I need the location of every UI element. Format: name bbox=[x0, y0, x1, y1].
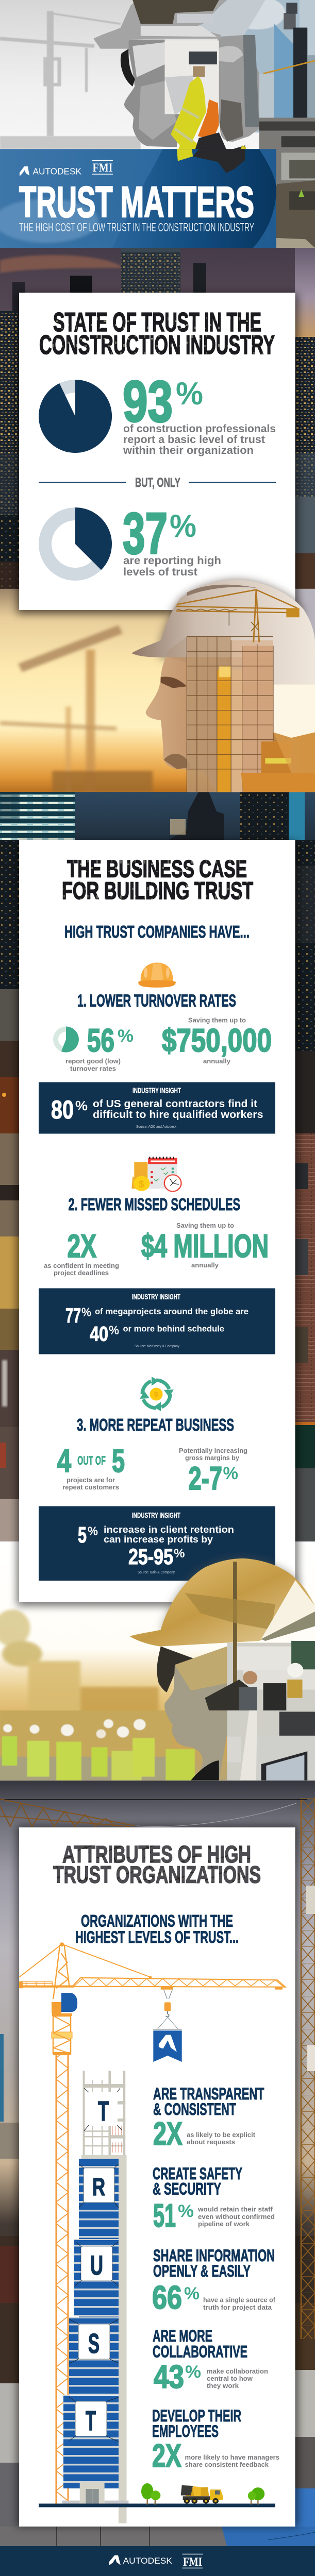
illustration: TRUST building tower bbox=[81, 2071, 127, 2523]
text: basic level of trust: within their organization bbox=[123, 445, 254, 456]
stat: 2-7 percent margins: % bbox=[223, 1464, 238, 1483]
attribute: collaborative: COLLABORATIVE bbox=[153, 2342, 247, 2361]
footer with logos: AUTODESK bbox=[123, 2556, 172, 2566]
attribute: collaborative: they work bbox=[207, 2382, 239, 2389]
callout: industry insight 3: Source: Bain & Company bbox=[138, 1571, 175, 1574]
attribute: develop employees: more likely to have managers bbox=[185, 2453, 279, 2461]
stat: 2-7 percent margins: Potentially increasing bbox=[179, 1447, 247, 1454]
attribute: share information: OPENLY & EASILY bbox=[153, 2262, 251, 2280]
card shadows bbox=[17, 294, 298, 2527]
attribute: transparent and consistent: as likely to be explicit bbox=[187, 2131, 256, 2139]
attribute: collaborative bbox=[153, 2327, 268, 2395]
callout: industry insight 1: difficult to hire qualified workers bbox=[93, 1109, 263, 1121]
pie chart: 56 percent bbox=[53, 1026, 79, 1052]
heading: state of trust bbox=[39, 308, 275, 360]
photo: man in hard hat with building inside bbox=[131, 580, 315, 792]
attribute: collaborative: ARE MORE bbox=[153, 2327, 212, 2345]
callout: industry insight 3: % bbox=[88, 1524, 98, 1538]
subheading: highest levels of trust: HIGHEST LEVELS OF TRUST... bbox=[75, 1928, 239, 1946]
text: basic level of trust bbox=[123, 423, 276, 456]
attribute: develop employees: share consistent feedback bbox=[185, 2461, 269, 2468]
attribute: collaborative: 43 bbox=[154, 2359, 184, 2395]
attribute: safety and security: would retain their staff bbox=[197, 2205, 273, 2213]
stat: 37 percent: % bbox=[170, 509, 196, 544]
icon: calendar, coins and clock bbox=[131, 1157, 181, 1191]
callout: industry insight 3: 5 bbox=[78, 1522, 87, 1548]
ground line bbox=[39, 2504, 275, 2507]
subheading: highest levels of trust bbox=[75, 1911, 239, 1946]
attribute: develop employees: 2X bbox=[152, 2438, 181, 2474]
stat: 4 out of 5: OUT OF bbox=[77, 1454, 106, 1468]
callout: industry insight 2: 77 bbox=[65, 1304, 81, 1327]
logos: Autodesk and FMI bbox=[20, 161, 113, 176]
stat: 2X confidence: 2X bbox=[67, 1228, 96, 1264]
callout: industry insight 1: INDUSTRY INSIGHT bbox=[132, 1086, 181, 1095]
stat: 2X confidence bbox=[44, 1228, 119, 1277]
logos: Autodesk and FMI: FMI bbox=[93, 161, 113, 174]
callout: industry insight 1 bbox=[39, 1082, 275, 1133]
callout: industry insight 3: can increase profits by bbox=[104, 1534, 213, 1545]
stat: 4 million savings: Saving them up to bbox=[176, 1222, 234, 1229]
callout: industry insight 2: or more behind schedule bbox=[123, 1324, 224, 1333]
header photo: two workers double exposure bbox=[0, 0, 315, 248]
stat: 2X confidence: project deadlines bbox=[54, 1269, 109, 1277]
stat: 2-7 percent margins: 2-7 bbox=[189, 1461, 222, 1497]
attribute: develop employees: EMPLOYEES bbox=[152, 2422, 219, 2441]
heading: lower turnover rates: 1. LOWER TURNOVER RATES bbox=[77, 991, 236, 1010]
attribute: share information: truth for project data bbox=[203, 2303, 272, 2311]
banner letters T R U S T: T bbox=[86, 2405, 96, 2436]
stat: 4 million savings: annually bbox=[191, 1261, 219, 1269]
logos: Autodesk and FMI: AUTODESK bbox=[33, 166, 81, 176]
night buildings background bbox=[0, 792, 315, 1541]
stat: 93 percent: 93 bbox=[123, 369, 173, 434]
panel: state of trust bbox=[19, 293, 295, 610]
text: high levels of trust: are reporting high bbox=[123, 555, 221, 567]
banner letters T R U S T: S bbox=[88, 2328, 100, 2359]
footer with logos: FMI bbox=[183, 2555, 202, 2568]
stat: 2-7 percent margins: gross margins by bbox=[185, 1454, 240, 1462]
pie chart: 37 percent bbox=[39, 507, 112, 581]
illustration: tower crane bbox=[19, 1942, 285, 2505]
banner letters T R U S T: U bbox=[90, 2250, 103, 2281]
icon: repeat cycle with coin bbox=[140, 1377, 174, 1411]
callout: industry insight 2: 40 bbox=[90, 1323, 108, 1346]
heading: business case bbox=[62, 855, 253, 905]
photo: woman in hard hat with office inside bbox=[129, 1558, 315, 1781]
callout: industry insight 3 bbox=[39, 1506, 275, 1581]
attribute: safety and security: % bbox=[178, 2201, 194, 2221]
attribute: transparent and consistent bbox=[153, 2084, 264, 2152]
attribute: safety and security bbox=[153, 2164, 275, 2234]
callout: industry insight 2 bbox=[39, 1288, 275, 1354]
text: basic level of trust: of construction professionals bbox=[123, 423, 276, 435]
attribute: collaborative: % bbox=[185, 2362, 201, 2382]
stat: 37 percent: 37 bbox=[123, 501, 168, 566]
callout: industry insight 2: Source: McKinsey & Company bbox=[135, 1345, 179, 1348]
callout: industry insight 2: % bbox=[81, 1306, 91, 1319]
banner letters T R U S T: T bbox=[98, 2096, 109, 2127]
heading: attributes bbox=[53, 1841, 261, 1888]
illustration: hook with Autodesk banner bbox=[153, 2002, 182, 2062]
crane jib and tower in the gray sky bbox=[0, 1798, 315, 2339]
text: basic level of trust: report a basic level of trust bbox=[123, 434, 265, 446]
stat: 56 percent: % bbox=[118, 1026, 134, 1046]
stat: 4 out of 5 bbox=[57, 1443, 125, 1491]
heading: more repeat business: 3. MORE REPEAT BUSINESS bbox=[77, 1415, 234, 1434]
illustration: cement truck bbox=[181, 2485, 223, 2504]
callout: industry insight 3: increase in client retention bbox=[104, 1524, 234, 1535]
subheading: highest levels of trust: ORGANIZATIONS WITH THE bbox=[81, 1911, 233, 1930]
attribute: safety and security: even without confirmed bbox=[198, 2213, 275, 2221]
callout: industry insight 3: INDUSTRY INSIGHT bbox=[132, 1511, 180, 1520]
attribute: safety and security: & SECURITY bbox=[153, 2179, 221, 2198]
yellow photo: blurred workers and office background bbox=[0, 1541, 315, 1781]
callout: industry insight 3: 25-95 bbox=[128, 1545, 173, 1569]
attribute: share information bbox=[152, 2246, 276, 2316]
callout: industry insight 2: % bbox=[109, 1324, 119, 1337]
attribute: safety and security: 51 bbox=[153, 2198, 176, 2234]
attribute: safety and security: CREATE SAFETY bbox=[153, 2164, 242, 2183]
stat: 4 million savings bbox=[141, 1222, 269, 1269]
stat: 4 out of 5: repeat customers bbox=[62, 1483, 119, 1491]
text: low turnover: report good (low) bbox=[65, 1057, 121, 1065]
stat: 750,000 savings bbox=[162, 1016, 272, 1065]
icon: repeat cycle with coin: $ bbox=[154, 1390, 158, 1398]
attribute: share information: % bbox=[184, 2284, 200, 2303]
attribute: collaborative: make collaboration bbox=[207, 2367, 268, 2375]
stat: 750,000 savings: $750,000 bbox=[162, 1023, 272, 1059]
banner letters T R U S T: R bbox=[92, 2174, 105, 2201]
text: high levels of trust bbox=[123, 555, 221, 578]
illustration: trees bbox=[141, 2483, 264, 2504]
stat: 93 percent: % bbox=[176, 376, 203, 412]
panel: attributes of high trust organizations bbox=[19, 1827, 295, 2527]
stat: 56 percent: 56 bbox=[87, 1023, 114, 1059]
callout: industry insight 3: % bbox=[174, 1547, 185, 1561]
attribute: transparent and consistent: about requests bbox=[187, 2138, 235, 2146]
text: low turnover bbox=[65, 1057, 121, 1073]
heading: attributes: ATTRIBUTES OF HIGH bbox=[62, 1841, 251, 1868]
stat: 4 million savings: $4 MILLION bbox=[141, 1228, 269, 1264]
panel: business case bbox=[19, 840, 295, 1602]
text: low turnover: turnover rates bbox=[70, 1064, 116, 1073]
stat: 4 out of 5: projects are for bbox=[67, 1476, 115, 1484]
attribute: transparent and consistent: ARE TRANSPARENT bbox=[153, 2084, 264, 2103]
orange photo: crane and man in hard hat background bbox=[0, 589, 315, 792]
building entrance bbox=[62, 2483, 128, 2504]
stat: 2X confidence: as confident in meeting bbox=[44, 1262, 119, 1269]
callout: industry insight 1: % bbox=[75, 1098, 88, 1113]
stat: 750,000 savings: annually bbox=[203, 1057, 231, 1065]
attribute: collaborative: central to how bbox=[207, 2375, 253, 2382]
footer with logos bbox=[0, 2546, 315, 2576]
callout: industry insight 1: of US general contractors find it bbox=[93, 1098, 257, 1110]
icon: calendar, coins and clock: $ bbox=[139, 1179, 144, 1190]
attribute: develop employees: DEVELOP THEIR bbox=[152, 2406, 241, 2425]
stat: 4 out of 5: 5 bbox=[112, 1443, 125, 1479]
city skyline background bbox=[0, 248, 315, 589]
attribute: safety and security: pipeline of work bbox=[198, 2220, 250, 2228]
stat: 2-7 percent margins bbox=[179, 1447, 247, 1497]
attribute: transparent and consistent: & CONSISTENT bbox=[153, 2100, 236, 2119]
attribute: develop employees bbox=[152, 2406, 279, 2474]
pie chart: 93 percent bbox=[39, 380, 112, 453]
gray sky and crane background bbox=[0, 1781, 315, 2546]
callout: industry insight 1: Source: AGC and Autodesk bbox=[136, 1125, 176, 1129]
callout: industry insight 1: 80 bbox=[51, 1095, 74, 1124]
stat: 750,000 savings: Saving them up to bbox=[188, 1016, 246, 1024]
attribute: transparent and consistent: 2X bbox=[153, 2116, 183, 2152]
callout: industry insight 2: INDUSTRY INSIGHT bbox=[132, 1293, 180, 1301]
attribute: share information: 66 bbox=[152, 2280, 182, 2316]
stat: 4 out of 5: 4 bbox=[57, 1443, 71, 1479]
callout: industry insight 2: of megaprojects around the globe are bbox=[95, 1307, 248, 1316]
text: high levels of trust: levels of trust bbox=[123, 566, 197, 578]
icon: hard hat bbox=[138, 963, 176, 988]
banner letters T R U S T bbox=[69, 2088, 122, 2442]
divider: but, only: BUT, ONLY bbox=[135, 476, 180, 490]
attribute: share information: have a single source of bbox=[203, 2296, 276, 2304]
